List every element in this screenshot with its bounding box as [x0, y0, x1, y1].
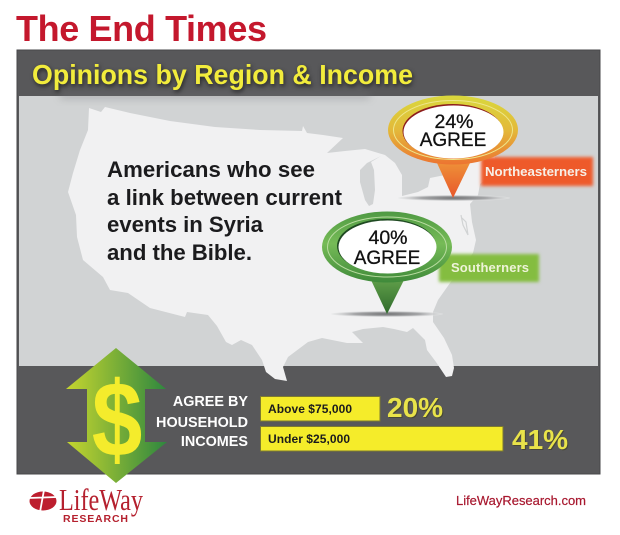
map: Lake Michigan [360, 156, 381, 206]
logo: LifeWay Research [29, 482, 143, 525]
label: agree by household incomes: AGREE BY [173, 394, 248, 410]
bar: above $75,000: Above $75,000 [268, 402, 352, 416]
label: agree by household incomes: INCOMES [181, 434, 248, 450]
label: Southerners: Southerners [451, 260, 529, 275]
bar: under $25,000: Under $25,000 [268, 432, 350, 446]
pin: northeast 24% [388, 96, 518, 201]
pin: northeast 24%: AGREE [420, 130, 486, 151]
bar: under $25,000 [260, 426, 503, 451]
pin: south 40%: AGREE [354, 248, 420, 269]
callout: intro text: and the Bible. [107, 240, 252, 265]
panel: dark background [17, 50, 600, 474]
header shadow [60, 92, 370, 99]
heading: opinions by region and income: Opinions by Region & Income [32, 59, 413, 90]
link: LifeWayResearch.com: LifeWayResearch.com [456, 493, 586, 508]
pin: south 40%: 40% [368, 227, 408, 249]
logo: LifeWay Research: LifeWay [59, 482, 143, 517]
value: 20%: 20% [387, 392, 443, 423]
label: Southerners [439, 254, 539, 282]
label: agree by household incomes [156, 394, 248, 450]
logo: LifeWay Research: RESEARCH [63, 513, 128, 525]
bar: above $75,000 [260, 396, 380, 421]
map: Chesapeake Bay [461, 215, 468, 235]
icon: double arrow with dollar sign [66, 348, 167, 483]
icon: double arrow with dollar sign: $ [92, 360, 142, 480]
callout: intro text: Americans who see [107, 157, 315, 182]
map: United States [68, 107, 497, 381]
pin: south 40% [322, 212, 452, 317]
label: agree by household incomes: HOUSEHOLD [156, 415, 248, 431]
callout: intro text: a link between current [107, 185, 343, 210]
label: Northeasterners [481, 157, 593, 186]
pin: northeast 24%: 24% [434, 111, 474, 133]
value: 41%: 41% [512, 424, 568, 455]
panel: map background [19, 96, 598, 366]
title: The End Times [16, 8, 267, 49]
callout: intro text: events in Syria [107, 212, 264, 237]
callout: intro text [107, 157, 343, 265]
label: Northeasterners: Northeasterners [485, 164, 587, 179]
